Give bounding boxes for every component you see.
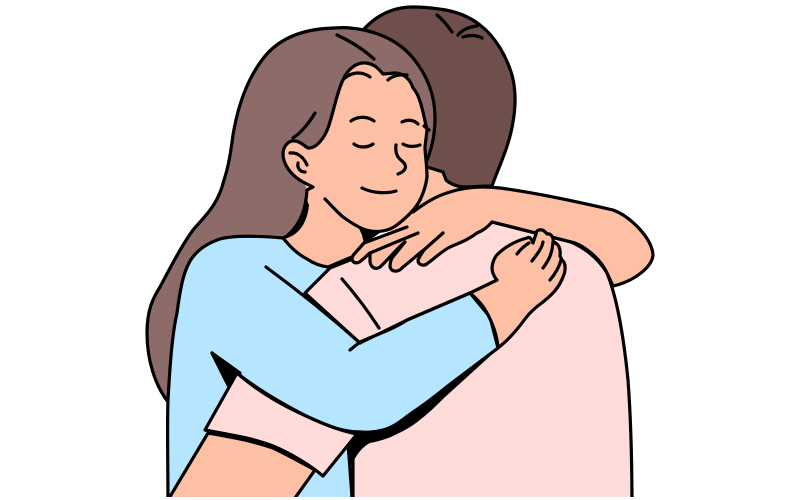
woman: face and ear (283, 63, 429, 231)
woman: pink cuff (205, 373, 357, 476)
smile (362, 188, 396, 193)
closed eyes (354, 144, 420, 147)
man: neck (418, 169, 459, 207)
woman: forearm (165, 433, 315, 500)
man: hair (364, 7, 515, 187)
eyebrows (351, 117, 418, 124)
skin between jaw and wrist (386, 218, 410, 232)
sleeve lower edge (212, 353, 383, 432)
neck outline (283, 187, 352, 267)
woman: hand on shoulder (470, 230, 565, 348)
man: pink torso (300, 222, 632, 500)
woman: blue top (168, 236, 498, 500)
illustration: two people hugging (145, 5, 655, 497)
man: arm and hand on shoulder (352, 187, 653, 286)
elbow shadow wedge (212, 353, 240, 385)
dark crescent beside neck (286, 200, 309, 238)
hair strand (337, 35, 374, 59)
shadow under sleeve (348, 349, 498, 466)
woman: long hair (147, 28, 435, 402)
nose (396, 145, 405, 174)
pink shirt lines (342, 279, 379, 328)
woman: neck (283, 185, 364, 267)
woman: sleeve edge (350, 293, 470, 350)
black shadow under jaw (359, 228, 380, 242)
blue top fold (266, 267, 360, 343)
